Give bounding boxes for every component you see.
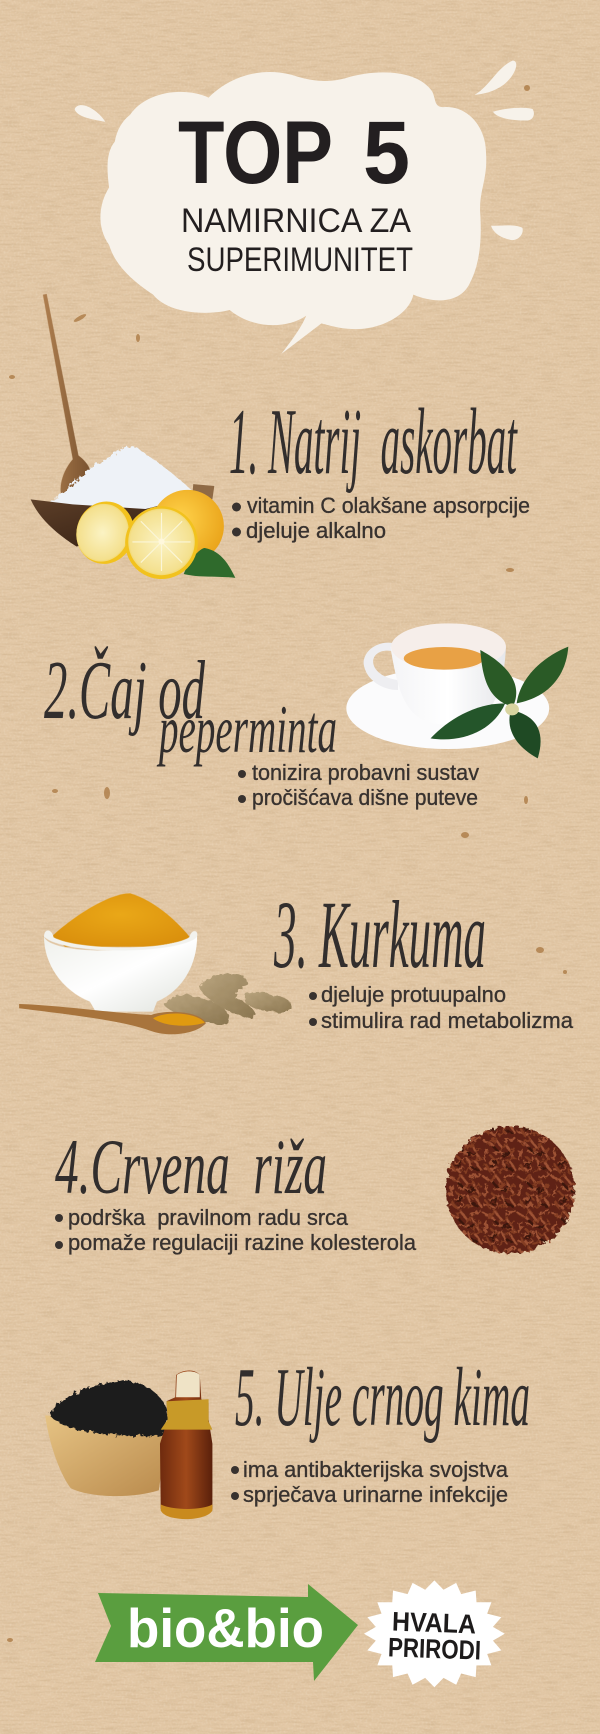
title — [178, 102, 413, 279]
heading 2 line 1: 2.Čaj od — [44, 644, 206, 737]
list 2 — [238, 760, 479, 810]
speech bubble cloud — [75, 60, 534, 354]
list 4 — [55, 1205, 417, 1255]
list 1 item 1: vitamin C olakšane apsorpcije — [247, 493, 530, 518]
badge: hvala prirodi — [364, 1580, 505, 1687]
list 4 item 2: pomaže regulaciji razine kolesterola — [68, 1230, 417, 1255]
list 4 item 1: podrška pravilnom radu srca — [68, 1205, 349, 1230]
badge line 1: HVALA — [392, 1607, 477, 1639]
list 5 — [231, 1457, 509, 1507]
heading 2 — [44, 644, 337, 767]
list 2 item 1: tonizira probavni sustav — [252, 760, 479, 785]
illustration: ascorbate bowl with lemons — [31, 294, 235, 579]
illustration: turmeric bowl, spoon and root — [19, 893, 293, 1034]
list 5 item 1: ima antibakterijska svojstva — [243, 1457, 509, 1482]
title: 5: 5 — [363, 102, 410, 202]
logo arrow — [95, 1584, 358, 1681]
list 5 item 2: sprječava urinarne infekcije — [243, 1482, 508, 1507]
subtitle line 1: NAMIRNICA ZA — [181, 202, 411, 240]
list 1 — [232, 493, 530, 543]
subtitle line 2: SUPERIMUNITET — [187, 241, 413, 279]
title: TOP: TOP — [178, 102, 333, 202]
illustration: tea cup with leaves — [346, 623, 568, 758]
list 2 item 2: pročišćava dišne puteve — [252, 785, 478, 810]
heading 2 line 2: peperminta — [157, 691, 337, 767]
heading 4: 4.Crvena riža — [55, 1123, 327, 1210]
list 3 item 1: djeluje protuupalno — [321, 982, 506, 1007]
illustration: red rice pile — [446, 1126, 574, 1254]
illustration: black seed bowl and oil bottle — [45, 1370, 212, 1519]
list 3 item 2: stimulira rad metabolizma — [321, 1008, 574, 1033]
list 3 — [309, 982, 574, 1033]
list 1 item 2: djeluje alkalno — [246, 518, 386, 543]
logo text: bio&bio — [127, 1597, 324, 1659]
badge line 2: PRIRODI — [388, 1632, 482, 1666]
